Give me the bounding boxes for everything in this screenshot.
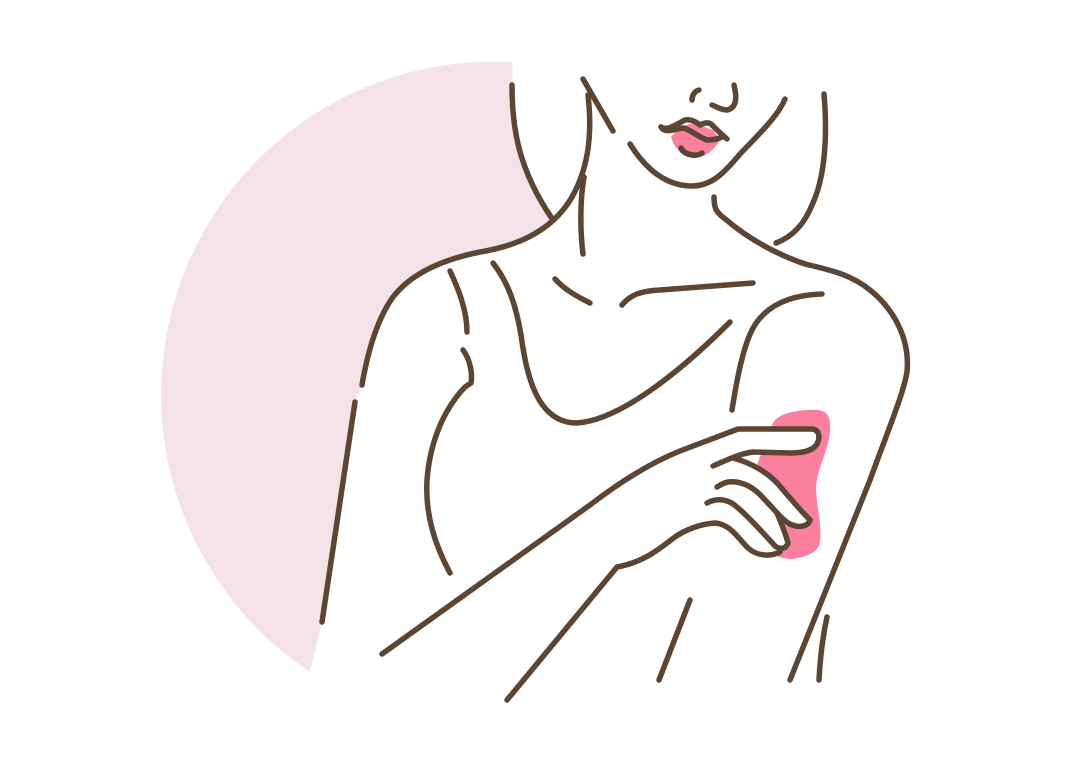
armpit fold <box>732 294 822 410</box>
hair left <box>512 85 553 220</box>
torso centre line <box>659 600 690 680</box>
dress strap left <box>450 271 467 332</box>
hair right <box>776 94 826 243</box>
jaw <box>630 99 785 186</box>
line art <box>322 79 907 700</box>
clavicle right <box>622 283 753 305</box>
neck line <box>581 177 584 254</box>
ring finger <box>707 500 788 548</box>
background circle <box>161 62 553 672</box>
dress side and breast <box>427 350 472 573</box>
icon: pink cream patch <box>755 410 830 559</box>
body left <box>322 402 355 622</box>
lips fill <box>671 123 720 158</box>
nose <box>692 90 699 100</box>
middle finger <box>717 458 810 526</box>
neckline <box>493 263 730 423</box>
right shoulder and arm <box>714 197 907 680</box>
forearm and index finger <box>382 429 819 654</box>
hand fill <box>600 429 819 560</box>
torso right line <box>819 617 827 680</box>
neck and left shoulder <box>362 95 590 385</box>
lips <box>661 120 727 139</box>
hair strand <box>583 79 613 131</box>
little finger and hand edge <box>507 523 780 700</box>
clavicle left <box>555 279 590 303</box>
